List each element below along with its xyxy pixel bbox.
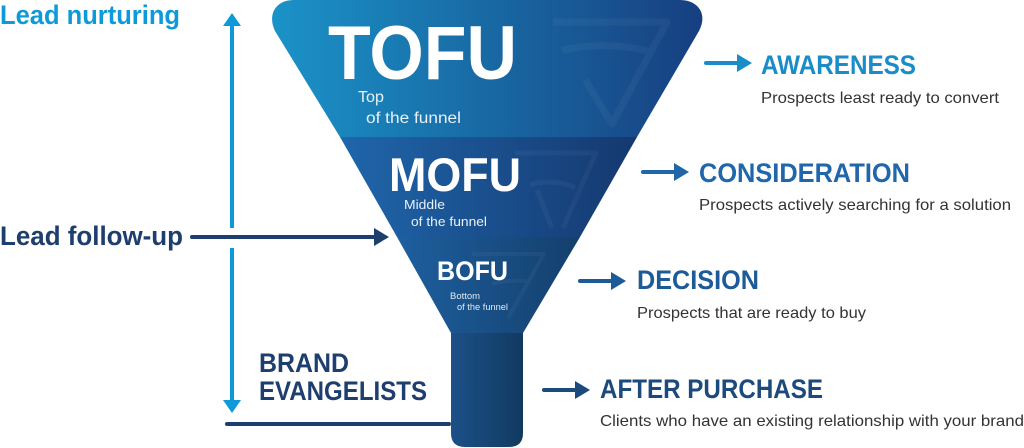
stage: awareness: Prospects least ready to convert <box>761 90 1000 107</box>
funnel stem <box>451 333 523 447</box>
stage: consideration: Prospects actively searching for a solution <box>699 197 1011 214</box>
funnel band: BOFU <box>397 237 580 333</box>
stage: decision: Prospects that are ready to buy <box>637 305 866 322</box>
label: bottom of the funnel <box>450 291 508 313</box>
stage: awareness: AWARENESS <box>761 50 916 80</box>
label: bottom of the funnel: Bottom <box>450 291 480 302</box>
stage: decision <box>637 265 866 322</box>
label: brand evangelists: BRAND <box>259 348 349 378</box>
arrow: lead nurturing vertical <box>223 13 241 413</box>
label: lead follow-up: Lead follow-up <box>0 221 183 251</box>
label: brand evangelists: EVANGELISTS <box>259 376 427 406</box>
label: middle of the funnel <box>404 197 487 229</box>
arrow: awareness <box>704 54 752 72</box>
label: top of the funnel: Top <box>358 89 384 106</box>
stage: after purchase <box>600 374 1024 430</box>
label: bottom of the funnel: of the funnel <box>457 302 508 313</box>
stage: after purchase: Clients who have an existing relationship with your brand <box>600 413 1024 430</box>
watermark: MOFU <box>515 153 596 228</box>
heading: TOFU: TOFU <box>328 11 517 96</box>
stage: consideration <box>699 158 1011 214</box>
stage: decision: DECISION <box>637 265 759 295</box>
funnel <box>272 0 702 447</box>
arrow: lead follow-up <box>190 228 389 246</box>
arrow: after purchase <box>542 381 590 399</box>
stage: awareness <box>761 50 1000 107</box>
heading: MOFU: MOFU <box>389 148 521 201</box>
arrow: decision <box>578 272 626 290</box>
funnel band: MOFU <box>340 137 637 237</box>
watermark: TOFU <box>553 22 667 124</box>
watermark: BOFU <box>472 254 544 318</box>
label: middle of the funnel: of the funnel <box>411 214 487 229</box>
funnel band: TOFU <box>272 0 702 137</box>
label: top of the funnel <box>358 89 461 127</box>
label: lead nurturing: Lead nurturing <box>0 0 180 30</box>
heading: BOFU: BOFU <box>437 256 508 286</box>
label: middle of the funnel: Middle <box>404 197 445 212</box>
stage: consideration: CONSIDERATION <box>699 158 910 188</box>
label: top of the funnel: of the funnel <box>366 110 461 127</box>
label: brand evangelists <box>259 348 427 406</box>
stage: after purchase: AFTER PURCHASE <box>600 374 823 404</box>
arrow: consideration <box>641 163 689 181</box>
line: brand evangelists <box>225 422 451 426</box>
